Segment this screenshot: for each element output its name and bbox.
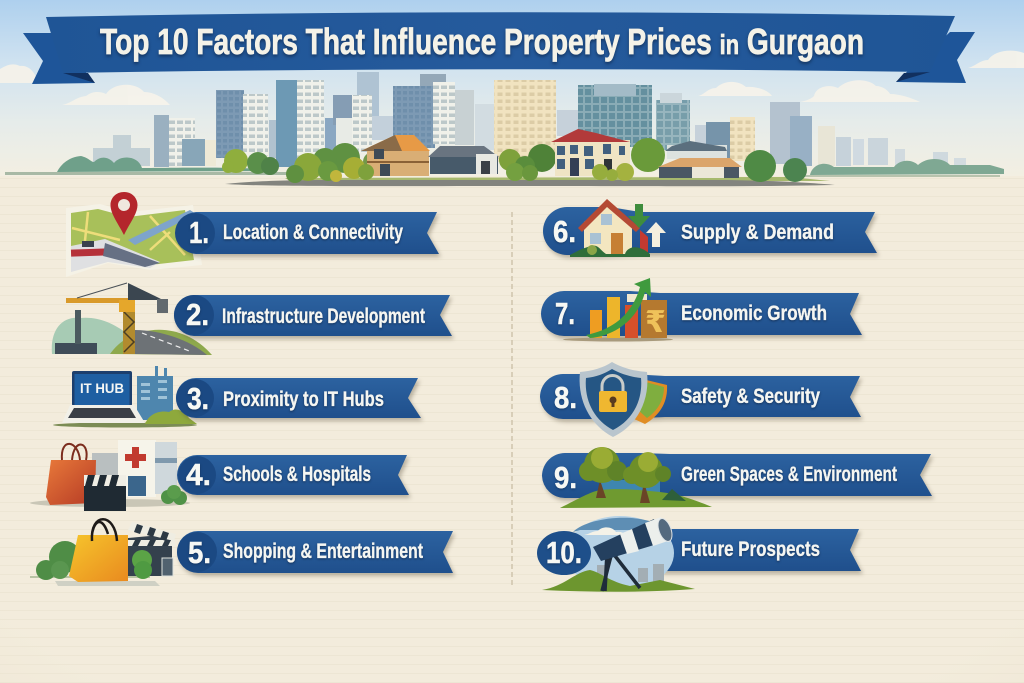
house 1 (361, 135, 430, 176)
ribbon (176, 378, 421, 418)
icon: crane and road (52, 283, 212, 355)
building I teal (557, 84, 690, 150)
factor 2 (52, 283, 452, 355)
number badge (178, 456, 216, 494)
ground strips (5, 172, 1000, 186)
title text: Top 10 Factors That Influence Property Prices in Gurgaon (100, 21, 864, 62)
building C (276, 80, 324, 167)
factor 4 (30, 440, 409, 511)
building B (216, 90, 278, 158)
factor 9 (542, 447, 932, 508)
banner fold shadows (63, 73, 95, 83)
trees behind (222, 138, 807, 182)
far buildings left (93, 135, 150, 166)
house 4 (658, 141, 742, 178)
ribbon (174, 295, 452, 336)
city skyline (5, 72, 1004, 186)
number badge (176, 379, 214, 417)
number: 4. (186, 457, 211, 492)
label: Supply & Demand (681, 221, 834, 244)
number: 2. (186, 297, 209, 332)
number: 1. (189, 215, 209, 250)
ribbon (543, 207, 877, 255)
bushes foreground right (506, 163, 634, 181)
building G (393, 74, 494, 150)
factor 10 (537, 516, 861, 592)
number: 6. (553, 214, 576, 249)
left tail (23, 33, 95, 84)
number: 10. (546, 535, 582, 570)
buildings K far right (770, 102, 966, 170)
banner body (46, 12, 955, 73)
icon: house with supply and demand arrows (570, 199, 666, 257)
icon: laptop IT hub (53, 366, 197, 428)
number: 7. (555, 296, 575, 331)
label: Schools & Hospitals (223, 463, 371, 486)
label: Shopping & Entertainment (223, 540, 423, 563)
number: 9. (554, 460, 577, 495)
label: Infrastructure Development (222, 305, 425, 328)
centre divider (511, 212, 513, 585)
icon: map with pin and train (66, 192, 202, 277)
icon: growth bars and rupee (563, 278, 673, 342)
ribbon (176, 212, 439, 254)
distant tree bands (57, 156, 1004, 175)
factor 3 (53, 366, 421, 428)
number: 5. (188, 535, 211, 570)
number: 8. (554, 380, 577, 415)
ribbon (541, 291, 862, 336)
icon: trees (560, 447, 712, 508)
factor 1 (66, 192, 439, 277)
bushes foreground left (286, 153, 374, 183)
ribbon (660, 529, 861, 571)
label: Location & Connectivity (223, 221, 403, 244)
house 2 (428, 146, 499, 174)
icon: shopping bag and clapper (30, 519, 176, 586)
ribbon (177, 455, 409, 495)
building H beige (494, 80, 556, 162)
number badge (174, 295, 214, 335)
icon: telescope scene (542, 516, 695, 592)
building J (695, 117, 755, 161)
number: 3. (187, 381, 209, 416)
number badge (175, 213, 215, 253)
clouds (0, 51, 1024, 105)
factor 6 (543, 199, 877, 257)
label: Proximity to IT Hubs (223, 388, 384, 411)
icon: bag, hospital and clapper (30, 440, 190, 511)
icon: shield with lock (580, 362, 667, 437)
factor 5 (30, 519, 453, 586)
ribbon (177, 531, 453, 573)
ribbon (540, 374, 861, 419)
number badge (177, 532, 217, 572)
sky (0, 0, 1024, 176)
factor 7 (541, 278, 862, 342)
label: Economic Growth (681, 302, 827, 325)
number badge (537, 531, 591, 575)
label: Green Spaces & Environment (681, 463, 897, 486)
building D and E (325, 72, 393, 154)
title banner (23, 12, 975, 84)
label: Future Prospects (681, 538, 820, 561)
icon: laptop IT hub: IT HUB (80, 380, 124, 396)
right tail (896, 32, 975, 83)
building A (154, 115, 216, 167)
icon: growth bars and rupee: ₹ (645, 305, 666, 340)
factor 8 (540, 362, 861, 437)
ribbon (542, 453, 932, 498)
label: Safety & Security (681, 385, 820, 408)
house 3 red roof (551, 129, 630, 176)
